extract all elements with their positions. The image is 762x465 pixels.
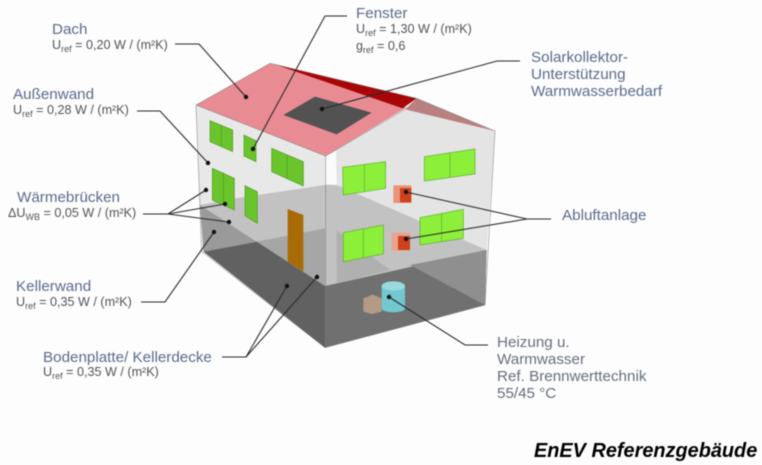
label: Dach (52, 21, 168, 54)
basement left wall (200, 205, 325, 286)
label: Bodenplatte/ Kellerdecke: Bodenplatte/ Kellerdecke (43, 349, 212, 366)
label: Abluftanlage: Abluftanlage (562, 207, 646, 224)
basement right wall (325, 250, 487, 348)
label: Kellerwand (16, 278, 132, 311)
basement floor (203, 242, 325, 348)
leader: Wärmebrücken (143, 188, 231, 224)
lower exhaust unit (392, 233, 410, 251)
title: EnEV Referenzgebäude (534, 440, 757, 462)
label: Außenwand: U (13, 103, 22, 117)
label: Wärmebrücken (8, 189, 136, 222)
leader: Kellerwand (141, 230, 216, 302)
label: Kellerwand: = 0,35 W / (m²K) (36, 295, 132, 309)
left windows (210, 121, 303, 223)
label: Wärmebrücken: Wärmebrücken (17, 189, 120, 206)
leader: Außenwand (137, 111, 210, 165)
label: Bodenplatte/ Kellerdecke: ref (52, 371, 63, 381)
label: Solarkollektor: Solarkollektor- (531, 49, 628, 66)
label: Heizung: Ref. Brennwerttechnik (497, 368, 647, 385)
front lower wall (257, 228, 325, 286)
label: Außenwand: ref (22, 109, 33, 119)
solar collector (283, 97, 372, 134)
label: Heizung: 55/45 °C (497, 385, 556, 402)
label: Fenster: ref (363, 45, 374, 55)
label: Fenster (356, 5, 472, 55)
right gable wall (325, 109, 495, 287)
label: Heizung (497, 334, 647, 402)
leader: Dach (175, 44, 248, 99)
door (288, 209, 303, 272)
roof (196, 63, 407, 156)
label: Fenster: = 0,6 (374, 39, 405, 53)
corner highlight (326, 150, 337, 185)
roof side (405, 98, 495, 131)
house illustration (196, 63, 495, 348)
label: Außenwand (13, 86, 129, 119)
roof ridge strip (272, 63, 417, 108)
label: Kellerwand: ref (25, 301, 36, 311)
right windows (343, 149, 475, 262)
leader: Heizung (387, 295, 488, 345)
label: Außenwand: = 0,28 W / (m²K) (33, 103, 129, 117)
label: Wärmebrücken: WB (26, 212, 40, 222)
water tank (382, 281, 405, 312)
upper exhaust unit (393, 185, 411, 203)
label: Wärmebrücken: ΔU (8, 206, 26, 220)
right basement shade (410, 250, 487, 305)
label: Kellerwand: U (16, 295, 25, 309)
leader: Solarkollektor (320, 61, 520, 111)
label: Wärmebrücken: = 0,05 W / (m²K) (40, 206, 136, 220)
label: Bodenplatte/ Kellerdecke: = 0,35 W / (m²K) (63, 365, 159, 379)
label: Bodenplatte/ Kellerdecke: U (43, 365, 52, 379)
label: Fenster: ref (365, 28, 376, 38)
leader: Abluftanlage (404, 190, 551, 241)
house outline (196, 63, 495, 348)
label: Fenster: g (356, 39, 363, 53)
label: Kellerwand: Kellerwand (16, 278, 91, 295)
right lower wall shade (325, 230, 390, 286)
label: Fenster: = 1,30 W / (m²K) (376, 22, 472, 36)
label: Dach: ref (61, 44, 72, 54)
label: Fenster: Fenster (356, 5, 408, 22)
label: Heizung: Warmwasser (497, 351, 585, 368)
label: Solarkollektor: Warmwasserbedarf (531, 83, 663, 100)
leader: Bodenplatte (222, 275, 319, 357)
left wall (196, 105, 326, 287)
label: Heizung: Heizung u. (497, 334, 570, 351)
label: Fenster: U (356, 22, 365, 36)
label: Solarkollektor: Unterstützung (531, 66, 626, 83)
leader: Fenster (251, 16, 347, 151)
label: Dach: Dach (52, 21, 87, 38)
label: Außenwand: Außenwand (13, 86, 94, 103)
boiler (363, 295, 382, 314)
label: Solarkollektor (531, 49, 663, 100)
label: Dach: U (52, 38, 61, 52)
label: Bodenplatte/ Kellerdecke (43, 349, 212, 381)
label: Dach: = 0,20 W / (m²K) (72, 38, 168, 52)
floor slab (200, 185, 487, 286)
